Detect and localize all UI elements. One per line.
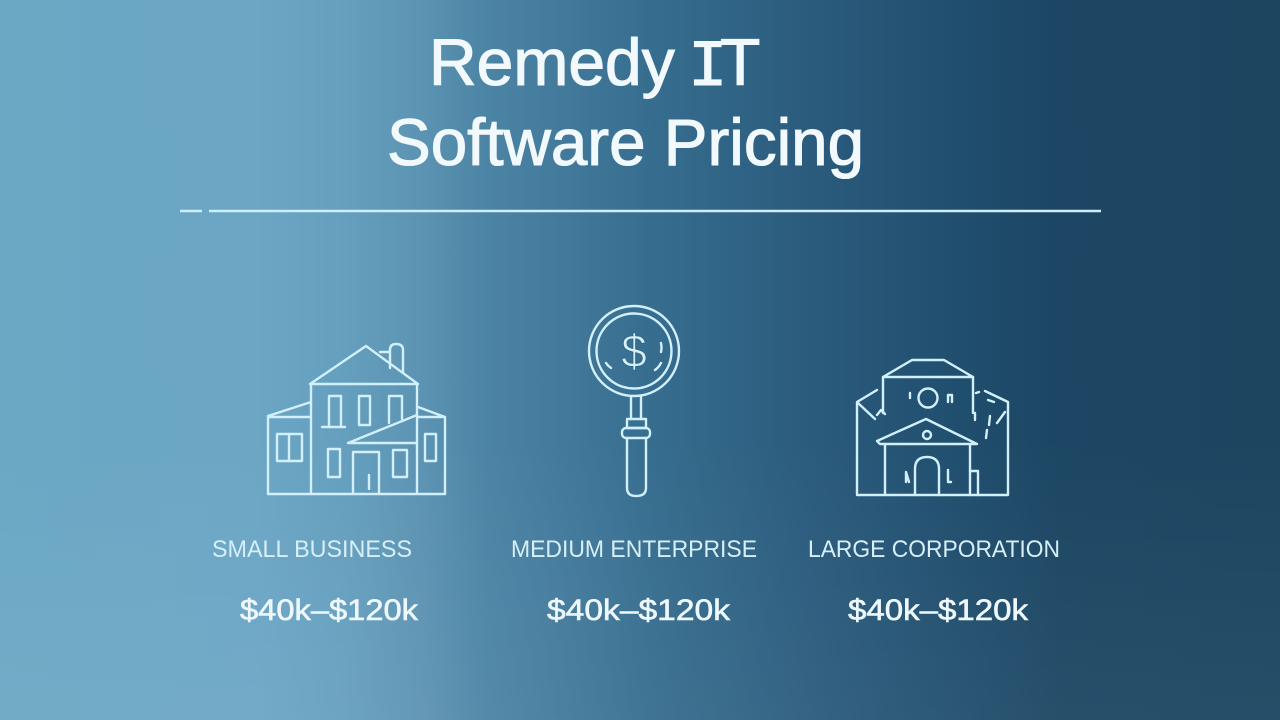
price: small business: $40k–$120k — [240, 594, 419, 627]
panel: large corporation — [808, 360, 1060, 627]
icon: house — [268, 344, 445, 494]
label: small business: SMALL BUSINESS — [212, 536, 412, 563]
title: Software Pricing — [387, 105, 864, 179]
label: medium enterprise: MEDIUM ENTERPRISE — [511, 536, 757, 563]
title divider — [180, 210, 1101, 212]
title: Remedy — [429, 25, 675, 99]
title: T — [720, 25, 760, 99]
panel: medium enterprise — [511, 306, 757, 627]
price: large corporation: $40k–$120k — [848, 594, 1029, 627]
icon: magnifier with dollar — [589, 306, 679, 496]
price: medium enterprise: $40k–$120k — [547, 594, 731, 627]
icon: corporate building — [857, 360, 1008, 495]
title: I — [688, 30, 728, 105]
title — [387, 25, 864, 179]
icon: magnifier with dollar: $ — [621, 325, 647, 377]
panel: small business — [212, 344, 445, 627]
label: large corporation: LARGE CORPORATION — [808, 536, 1060, 563]
